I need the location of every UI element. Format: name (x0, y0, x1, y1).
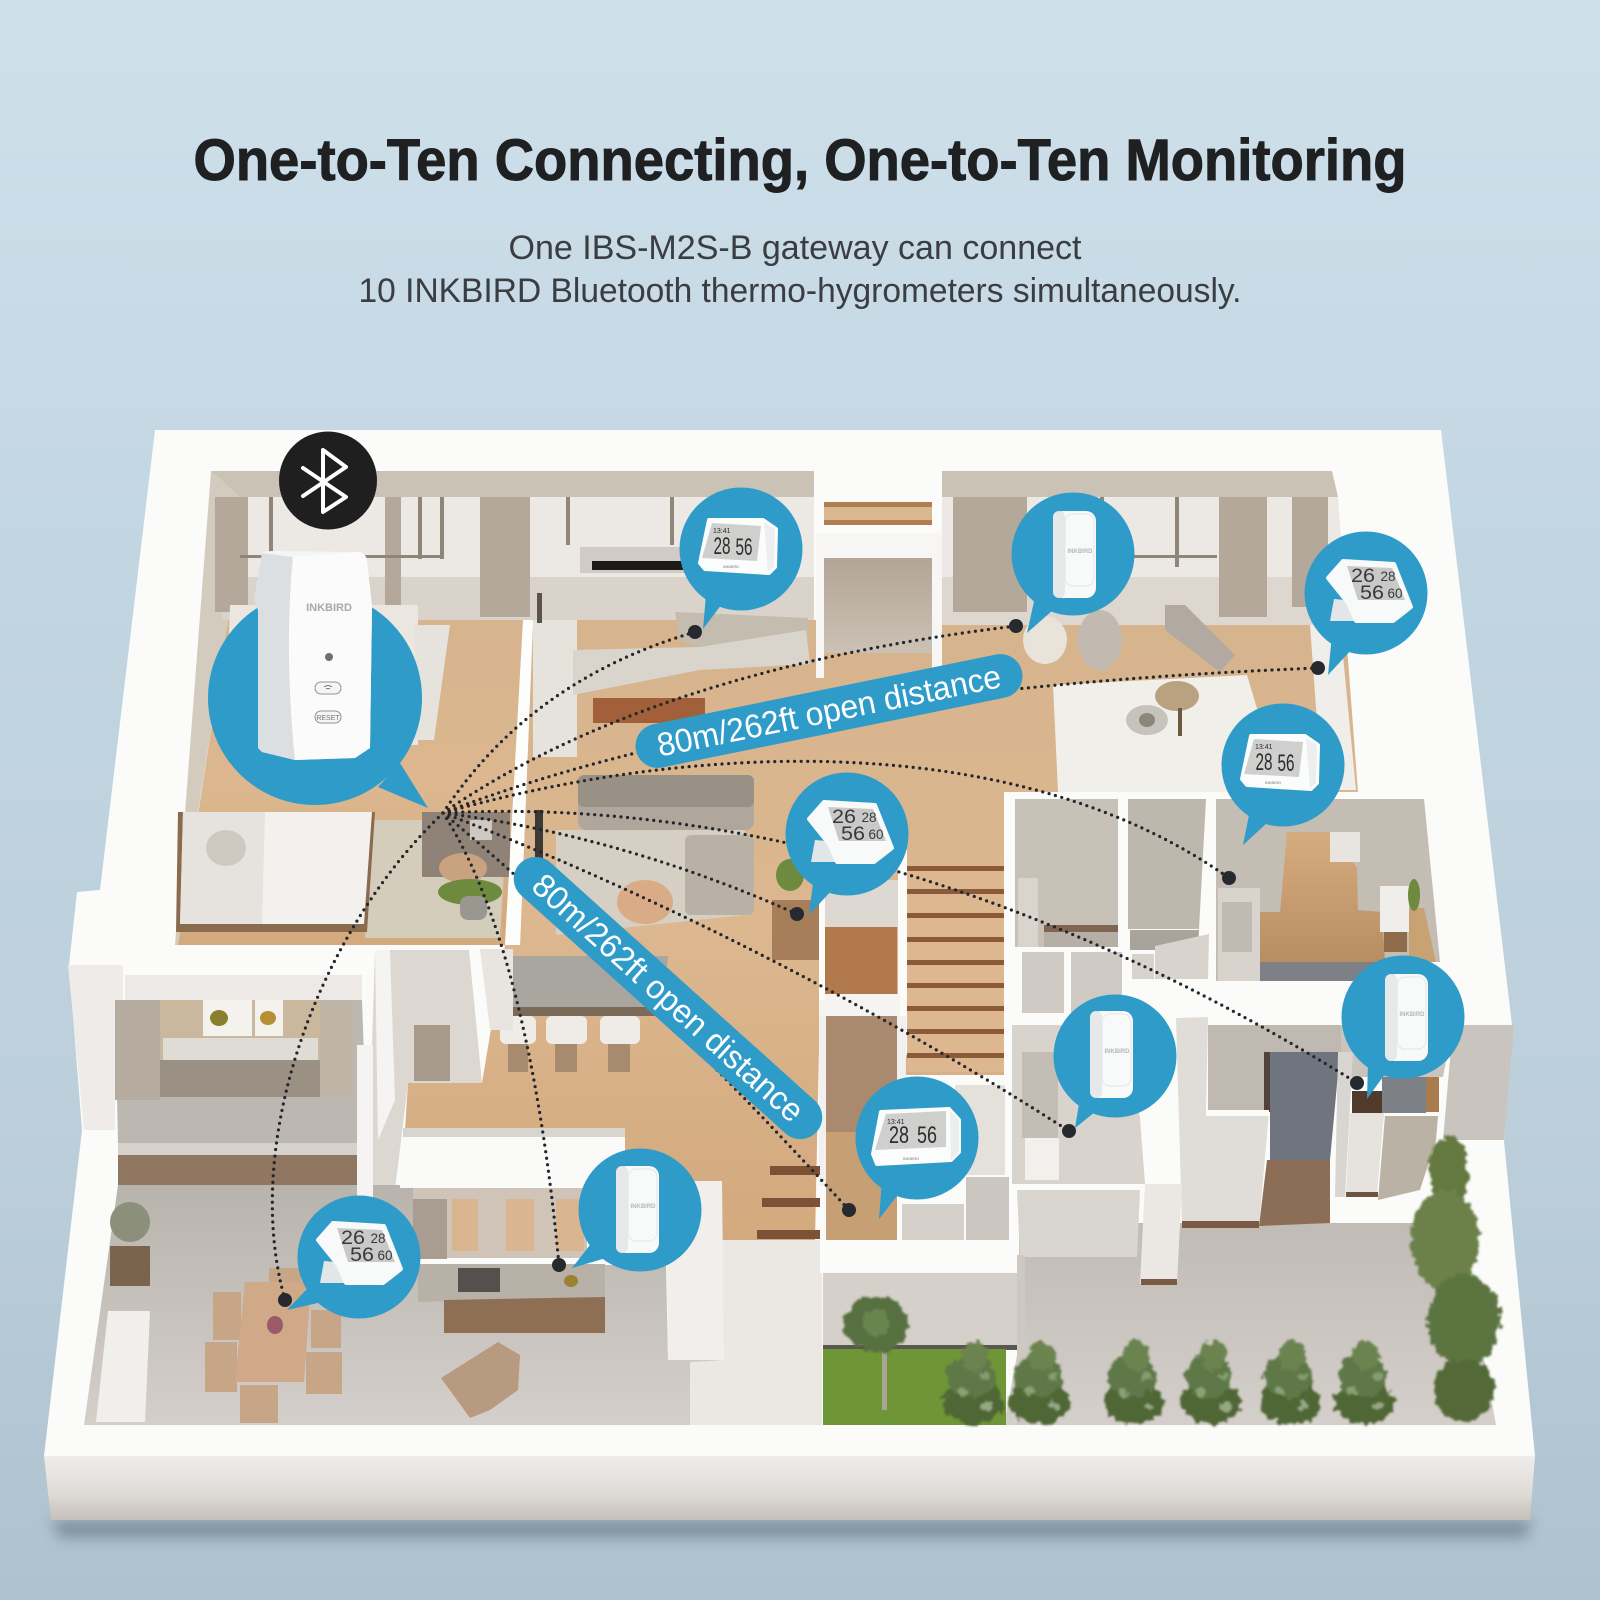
lower stairs (757, 1166, 820, 1239)
patio room (68, 965, 367, 1185)
tile floor centre (690, 1240, 822, 1425)
sensor bubble: display 5: 28 (889, 1122, 909, 1149)
sensor bubble: display 4 (786, 772, 908, 915)
elevator column (819, 880, 906, 1240)
sensor bubble: display 3: 56 (1278, 750, 1294, 777)
sensor bubble: display 2: 28 (1380, 568, 1396, 584)
distance label: diagonal: 80m/262ft open distance (525, 866, 812, 1129)
hedge (1411, 1136, 1500, 1422)
lower left floor (84, 1185, 822, 1425)
door (1264, 1052, 1272, 1112)
sensor bubble: display 1: 56 (736, 534, 752, 561)
sensor bubble: display 1: INKBIRD (723, 564, 739, 569)
gateway device (254, 551, 372, 760)
sensor bubble: stick 1: INKBIRD (1068, 549, 1093, 555)
sensor bubble: display 5: 56 (917, 1122, 937, 1149)
subtitle (358, 229, 1242, 310)
sensor bubble: stick 3 (1054, 994, 1176, 1128)
sensor bubble: stick 4 (572, 1148, 702, 1272)
sensor bubble: stick 2: INKBIRD (1400, 1012, 1425, 1018)
room C (1216, 799, 1445, 981)
sensor bubble: display 6: 60 (378, 1247, 393, 1263)
sensor bubble: display 5 (856, 1076, 978, 1219)
living room (535, 593, 822, 960)
base front face (44, 1456, 1535, 1520)
floor plan model (44, 430, 1535, 1538)
sensor bubble: display 1: 13:41 (713, 528, 731, 535)
subtitle: 10 INKBIRD Bluetooth thermo-hygrometers simultaneously. (358, 272, 1242, 310)
dining counter and chairs (500, 956, 668, 1072)
distance label: horizontal: 80m/262ft open distance (654, 657, 1004, 764)
sensor bubble: display 6 (287, 1196, 420, 1318)
sensor bubble: display 5: 13:41 (887, 1119, 905, 1126)
hallway wall (357, 949, 513, 1200)
title: One-to-Ten Connecting, One-to-Ten Monitoring (194, 128, 1406, 193)
room A (1015, 799, 1122, 1013)
stairs (898, 792, 1019, 1240)
lower right wing (1004, 1017, 1514, 1425)
sensor bubble: display 1: 28 (714, 533, 730, 560)
sensor bubble: display 6: 56 (350, 1245, 374, 1266)
sensor bubble: display 2: 60 (1388, 585, 1403, 601)
sensor bubble: display 3 (1222, 704, 1344, 845)
sensor bubble: display 3: 13:41 (1255, 744, 1273, 751)
back wall (1208, 1025, 1341, 1110)
gateway device: INKBIRD (306, 602, 352, 614)
dotted connection lines (272, 626, 1357, 1300)
sensor bubble: display 2: 26 (1351, 566, 1375, 587)
base top surface (44, 430, 1535, 1456)
sensor bubble: display 2 (1304, 532, 1428, 675)
sensor bubble: display 5: INKBIRD (903, 1156, 919, 1161)
sensor bubble: display 4: 28 (862, 809, 877, 825)
sensor bubble: stick 4: INKBIRD (630, 1204, 656, 1210)
courtyard ledge and grass (820, 1240, 1025, 1425)
sensor bubble: stick 2 (1342, 956, 1464, 1099)
sensor bubble: display 4: 60 (868, 826, 884, 842)
column wall (1176, 1017, 1269, 1226)
room B (1128, 799, 1209, 979)
sensor bubble: display 2: 56 (1360, 583, 1384, 604)
gateway bubble (208, 591, 428, 808)
subtitle: One IBS-M2S-B gateway can connect (508, 229, 1082, 267)
kitchen block (357, 1045, 724, 1360)
left sideboard and plant (96, 1202, 150, 1422)
palm tree (844, 1296, 908, 1410)
sensor bubble: display 4: 56 (841, 824, 865, 845)
white divider wall (505, 623, 533, 945)
central column and stair landing (816, 502, 942, 678)
upper right room (942, 471, 1356, 792)
gateway device: RESET (316, 715, 340, 722)
row of shrubs (943, 1341, 1394, 1424)
sensor bubble: stick 3: INKBIRD (1104, 1049, 1130, 1055)
sensor bubble: display 3: INKBIRD (1265, 780, 1281, 785)
kitchen island (533, 612, 810, 757)
sensor bubble: stick 1 (1012, 492, 1134, 633)
sensor bubble: display 3: 28 (1256, 749, 1272, 776)
sensor bubble: display 6: 26 (341, 1228, 365, 1249)
sensor location dots (278, 619, 1364, 1307)
central wood floor (405, 620, 1358, 1240)
bluetooth badge (279, 432, 377, 530)
sensor bubble: display 6: 28 (370, 1230, 386, 1246)
upper left room (175, 471, 814, 945)
dining table set (205, 1268, 342, 1423)
sensor bubble: display 4: 26 (832, 807, 856, 828)
lounge chair (441, 1342, 520, 1418)
bathroom block (902, 1025, 1182, 1285)
sensor bubble: display 1 (680, 488, 802, 629)
right bedrooms (1015, 799, 1445, 1013)
